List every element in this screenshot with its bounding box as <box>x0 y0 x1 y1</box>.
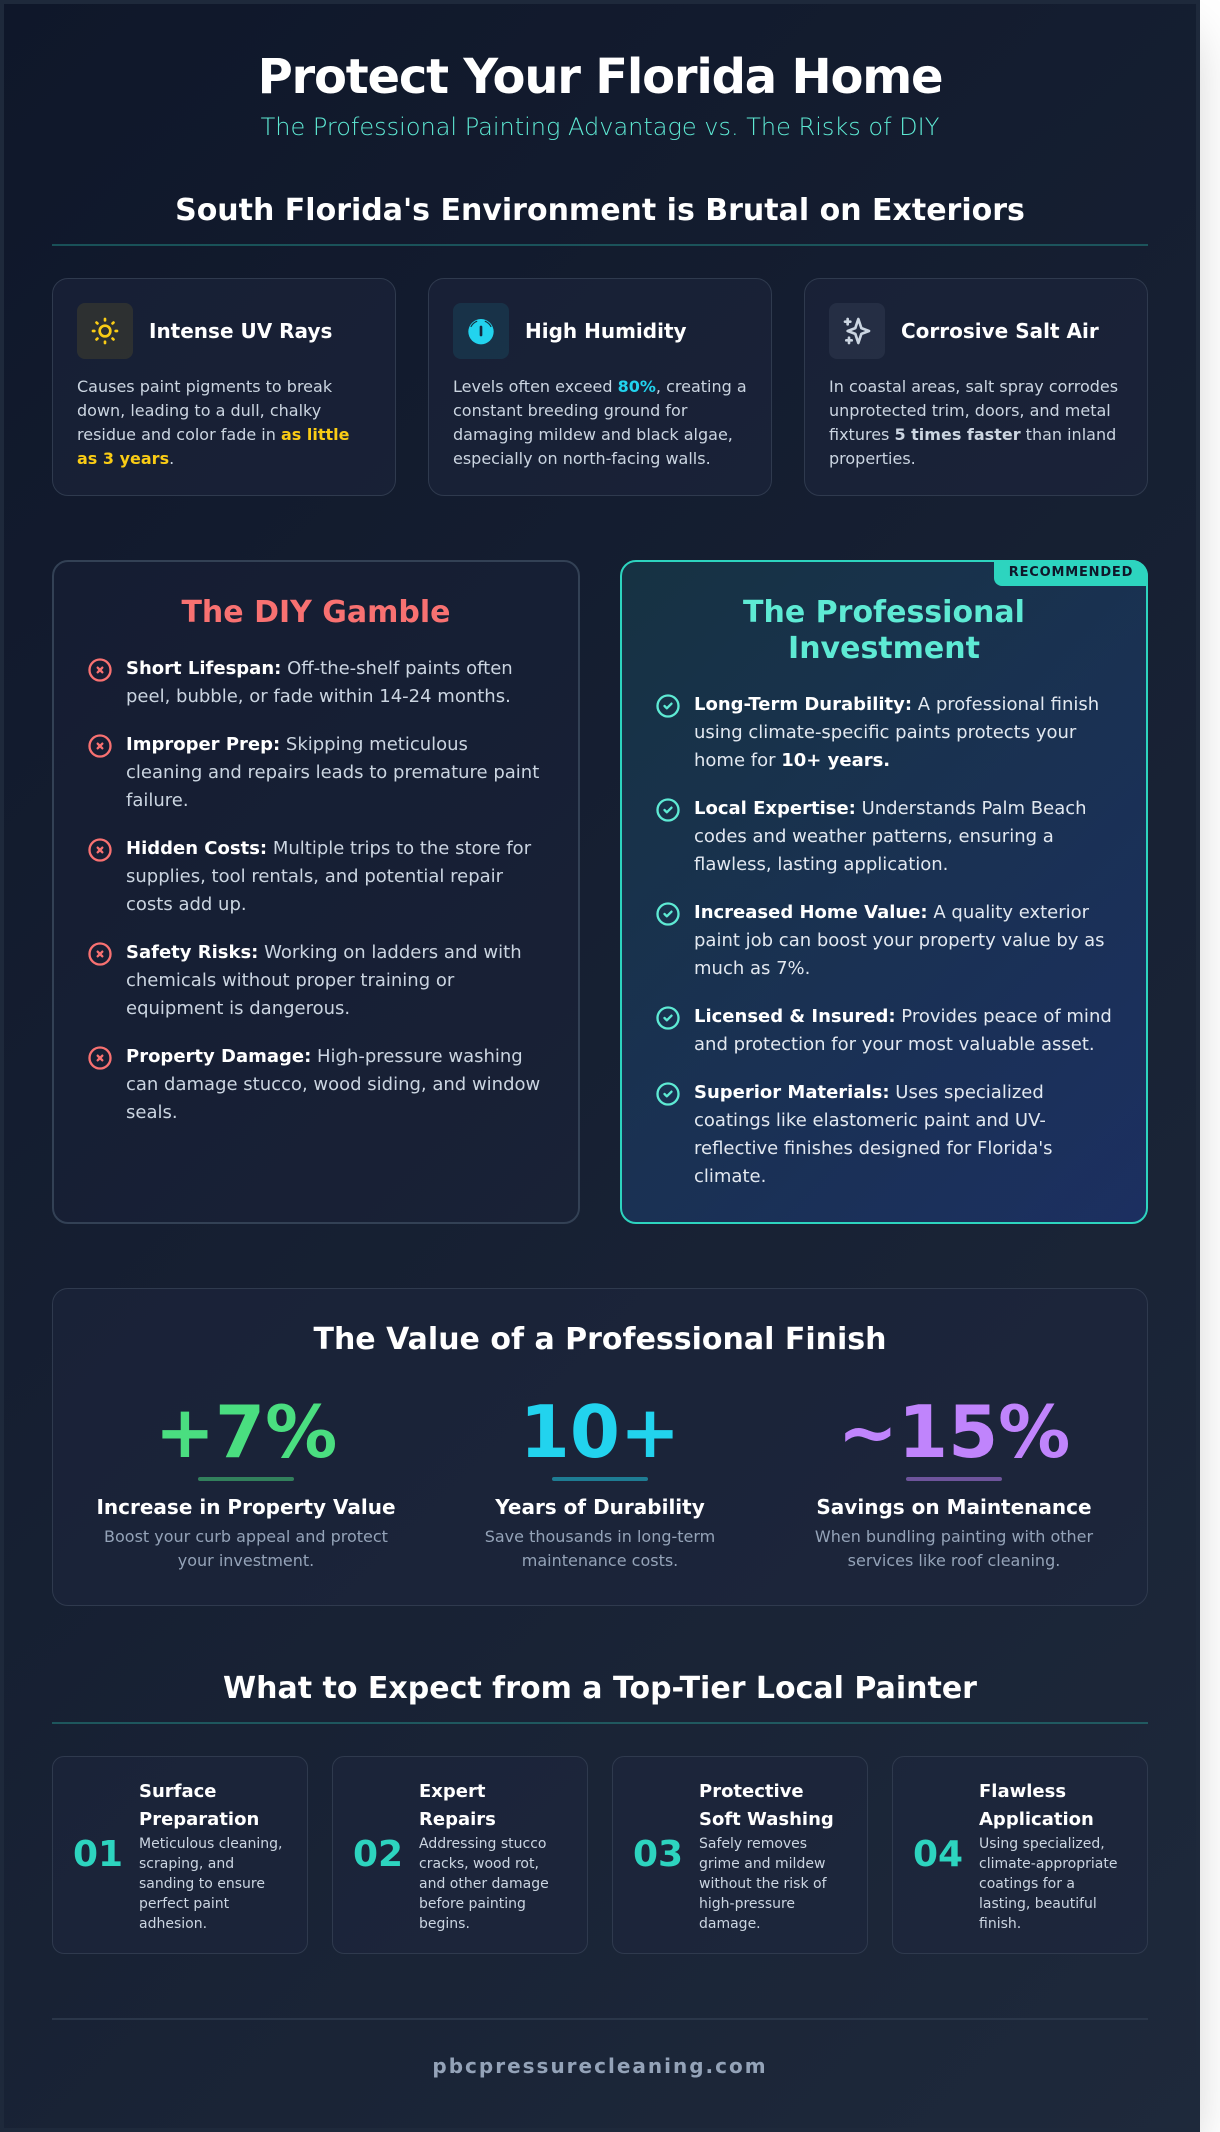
step text: cracks, wood rot, <box>419 1856 539 1872</box>
card text: down, leading to a dull, chalky <box>77 401 321 420</box>
item: safety risks: chemicals without proper training or <box>126 970 454 991</box>
item: durability <box>656 694 1099 771</box>
stat: durability <box>485 1390 715 1570</box>
description: When bundling painting with other <box>815 1527 1093 1546</box>
heading: what to expect: What to Expect from a Top-Tier Local Painter <box>223 1671 977 1706</box>
step text <box>419 1836 549 1932</box>
step text: adhesion. <box>139 1916 207 1932</box>
card text: residue and color fade in as little <box>77 425 349 444</box>
item: improper prep: Improper Prep: Skipping meticulous <box>126 734 468 755</box>
stat: savings <box>815 1390 1094 1570</box>
item: safety risks: equipment is dangerous. <box>126 998 350 1019</box>
step text: climate-appropriate <box>979 1856 1117 1872</box>
card heading: High Humidity <box>525 319 687 343</box>
step title <box>419 1781 496 1830</box>
step title: Protective <box>699 1781 804 1802</box>
step text: and other damage <box>419 1876 549 1892</box>
item: licensed: and protection for your most valuable asset. <box>694 1034 1095 1055</box>
panel heading <box>743 595 1025 666</box>
item: improper prep: cleaning and repairs leads to premature paint <box>126 762 539 783</box>
panel: value of a professional finish <box>52 1288 1148 1606</box>
item: property damage: can damage stucco, wood siding, and window <box>126 1074 540 1095</box>
panel: Corrosive Salt Air <box>804 278 1148 496</box>
card text: Causes paint pigments to break <box>77 377 332 396</box>
step title: Flawless <box>979 1781 1066 1802</box>
item: licensed <box>656 1006 1112 1055</box>
step title: Application <box>979 1809 1094 1830</box>
stat: property value <box>96 1390 396 1570</box>
step text: high-pressure <box>699 1896 795 1912</box>
step text: sanding to ensure <box>139 1876 265 1892</box>
step title: Expert <box>419 1781 485 1802</box>
item: hidden costs: Hidden Costs: Multiple trips to the store for <box>126 838 531 859</box>
panel heading: The DIY Gamble <box>181 595 451 630</box>
panel: DIY Gamble <box>52 560 580 1224</box>
card text: In coastal areas, salt spray corrodes <box>829 377 1118 396</box>
step text: coatings for a <box>979 1876 1075 1892</box>
description: services like roof cleaning. <box>848 1551 1060 1570</box>
step number: 01 <box>73 1834 123 1875</box>
step 02 <box>332 1756 588 1954</box>
item: local expertise: codes and weather patterns, ensuring a <box>694 826 1054 847</box>
card text: as 3 years. <box>77 449 174 468</box>
item: safety risks <box>88 942 522 1019</box>
item: materials: Superior Materials: Uses specialized <box>694 1082 1044 1103</box>
description: Boost your curb appeal and protect <box>104 1527 388 1546</box>
step text: before painting <box>419 1896 526 1912</box>
panel: Intense UV Rays <box>52 278 396 496</box>
step title: Surface <box>139 1781 217 1802</box>
card text: properties. <box>829 449 916 468</box>
card text <box>77 377 349 468</box>
title: Protect Your Florida Home <box>258 49 942 105</box>
description <box>815 1527 1094 1570</box>
step text: damage. <box>699 1916 761 1932</box>
card text <box>453 377 747 468</box>
label: Increase in Property Value <box>96 1495 396 1519</box>
card text: constant breeding ground for <box>453 401 687 420</box>
step text <box>139 1836 282 1932</box>
description: your investment. <box>178 1551 314 1570</box>
item: materials: coatings like elastomeric paint and UV- <box>694 1110 1046 1131</box>
number: 10+ <box>520 1390 680 1474</box>
description: maintenance costs. <box>522 1551 678 1570</box>
item: home value: much as 7%. <box>694 958 810 979</box>
item: property damage <box>88 1046 540 1123</box>
item: hidden costs <box>88 838 532 915</box>
item: durability: home for 10+ years. <box>694 750 890 771</box>
panel heading: The Professional <box>743 595 1025 630</box>
description: Save thousands in long-term <box>485 1527 715 1546</box>
step 03 <box>612 1756 868 1954</box>
recommended badge <box>994 560 1148 586</box>
number: ~15% <box>838 1390 1070 1474</box>
item: materials: reflective finishes designed for Florida's <box>694 1138 1053 1159</box>
step text: lasting, beautiful <box>979 1896 1097 1912</box>
description <box>485 1527 715 1570</box>
item: short lifespan <box>88 658 513 707</box>
recommended badge: RECOMMENDED <box>1009 565 1133 580</box>
icon: humidity <box>453 303 509 359</box>
step text: without the risk of <box>699 1876 826 1892</box>
step text: grime and mildew <box>699 1856 825 1872</box>
item: safety risks: Safety Risks: Working on ladders and with <box>126 942 522 963</box>
icon: sun <box>77 303 133 359</box>
item: home value <box>656 902 1105 979</box>
item: hidden costs: supplies, tool rentals, and potential repair <box>126 866 503 887</box>
step number: 04 <box>913 1834 963 1875</box>
step text: Using specialized, <box>979 1836 1105 1852</box>
item: local expertise <box>656 798 1087 875</box>
panel heading: Investment <box>788 631 980 666</box>
number: +7% <box>155 1390 337 1474</box>
panel: High Humidity <box>428 278 772 496</box>
label: Years of Durability <box>495 1495 705 1519</box>
step text: scraping, and <box>139 1856 234 1872</box>
step text: perfect paint <box>139 1896 229 1912</box>
step title: Soft Washing <box>699 1809 834 1830</box>
step text <box>979 1836 1117 1932</box>
step text: Meticulous cleaning, <box>139 1836 282 1852</box>
step text: Safely removes <box>699 1836 807 1852</box>
label: Savings on Maintenance <box>816 1495 1092 1519</box>
item: durability: using climate-specific paints protects your <box>694 722 1076 743</box>
item: durability: Long-Term Durability: A professional finish <box>694 694 1099 715</box>
item: improper prep <box>88 734 539 811</box>
step text: begins. <box>419 1916 470 1932</box>
item: home value: paint job can boost your property value by as <box>694 930 1105 951</box>
item: property damage: seals. <box>126 1102 178 1123</box>
subtitle: The Professional Painting Advantage vs. The Risks of DIY <box>261 113 939 141</box>
step text: finish. <box>979 1916 1021 1932</box>
item: local expertise: Local Expertise: Understands Palm Beach <box>694 798 1087 819</box>
step number: 02 <box>353 1834 403 1875</box>
step text <box>699 1836 827 1932</box>
card text: especially on north-facing walls. <box>453 449 711 468</box>
item: licensed: Licensed & Insured: Provides peace of mind <box>694 1006 1112 1027</box>
item: property damage: Property Damage: High-pressure washing <box>126 1046 523 1067</box>
item: short lifespan: peel, bubble, or fade within 14-24 months. <box>126 686 511 707</box>
item: materials <box>656 1082 1053 1187</box>
step title <box>139 1781 259 1830</box>
heading: environment: South Florida's Environment is Brutal on Exteriors <box>175 193 1025 228</box>
card heading: Intense UV Rays <box>149 319 332 343</box>
card text <box>829 377 1118 468</box>
card text: damaging mildew and black algae, <box>453 425 733 444</box>
item: improper prep: failure. <box>126 790 189 811</box>
description <box>104 1527 388 1570</box>
step title: Preparation <box>139 1809 259 1830</box>
step title: Repairs <box>419 1809 496 1830</box>
panel heading: The Value of a Professional Finish <box>313 1322 887 1357</box>
item: short lifespan: Short Lifespan: Off-the-shelf paints often <box>126 658 513 679</box>
step number: 03 <box>633 1834 683 1875</box>
step text: Addressing stucco <box>419 1836 546 1852</box>
item: home value: Increased Home Value: A quality exterior <box>694 902 1089 923</box>
card text: Levels often exceed 80%, creating a <box>453 377 747 396</box>
step title <box>699 1781 834 1830</box>
card heading: Corrosive Salt Air <box>901 319 1099 343</box>
item: hidden costs: costs add up. <box>126 894 247 915</box>
panel: Professional Investment <box>620 560 1148 1224</box>
card text: unprotected trim, doors, and metal <box>829 401 1111 420</box>
item: local expertise: flawless, lasting application. <box>694 854 948 875</box>
step title <box>979 1781 1094 1830</box>
icon: sparkles <box>829 303 885 359</box>
step 04 <box>892 1756 1148 1954</box>
step 01 <box>52 1756 308 1954</box>
item: materials: climate. <box>694 1166 766 1187</box>
card text: fixtures 5 times faster than inland <box>829 425 1116 444</box>
footer: pbcpressurecleaning.com <box>432 2054 768 2078</box>
